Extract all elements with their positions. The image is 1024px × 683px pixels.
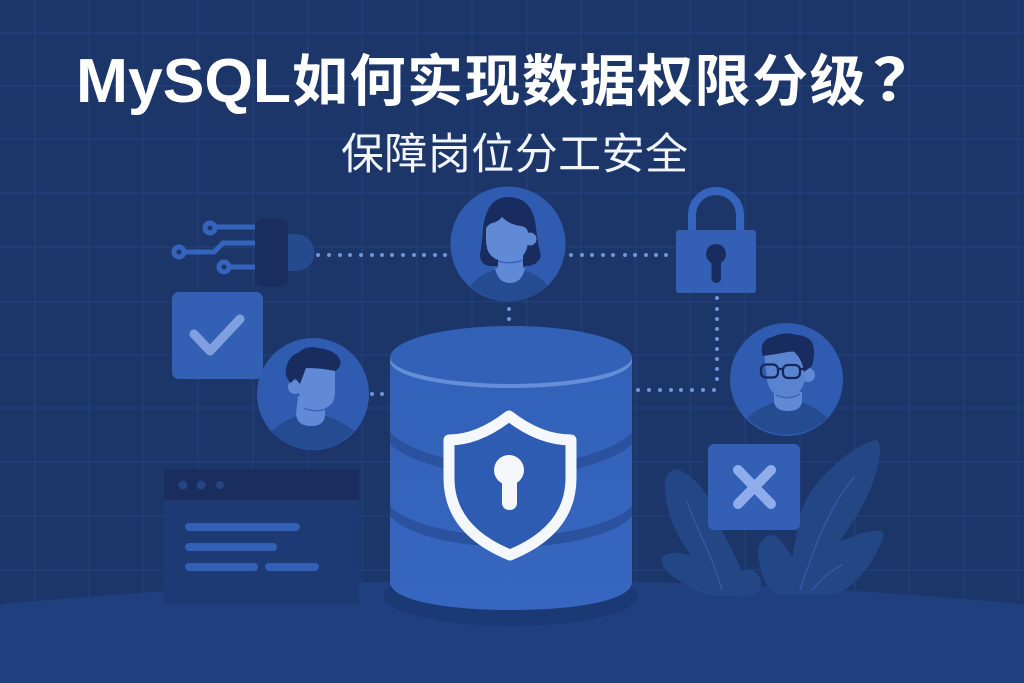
avatar: woman, top [450,186,566,302]
icon: cross box [708,444,800,530]
icon: padlock [676,191,756,293]
browser window panel [164,469,359,605]
dotted connectors [316,253,719,396]
icon: check box [172,292,263,379]
icon: circuit plug [174,219,314,287]
title: ？ [872,49,939,113]
ground [0,580,1024,683]
title [76,47,939,116]
title: 如何实现数据权限分级 [292,50,867,113]
avatar: man with glasses, right [730,323,843,436]
icon: leaves [662,440,884,596]
subtitle: 保障岗位分工安全 [341,131,688,179]
title: MySQL [76,47,291,116]
database cylinder with shield [384,326,638,626]
avatar: man, left [257,338,369,450]
icon: shield with keyhole [449,416,571,555]
